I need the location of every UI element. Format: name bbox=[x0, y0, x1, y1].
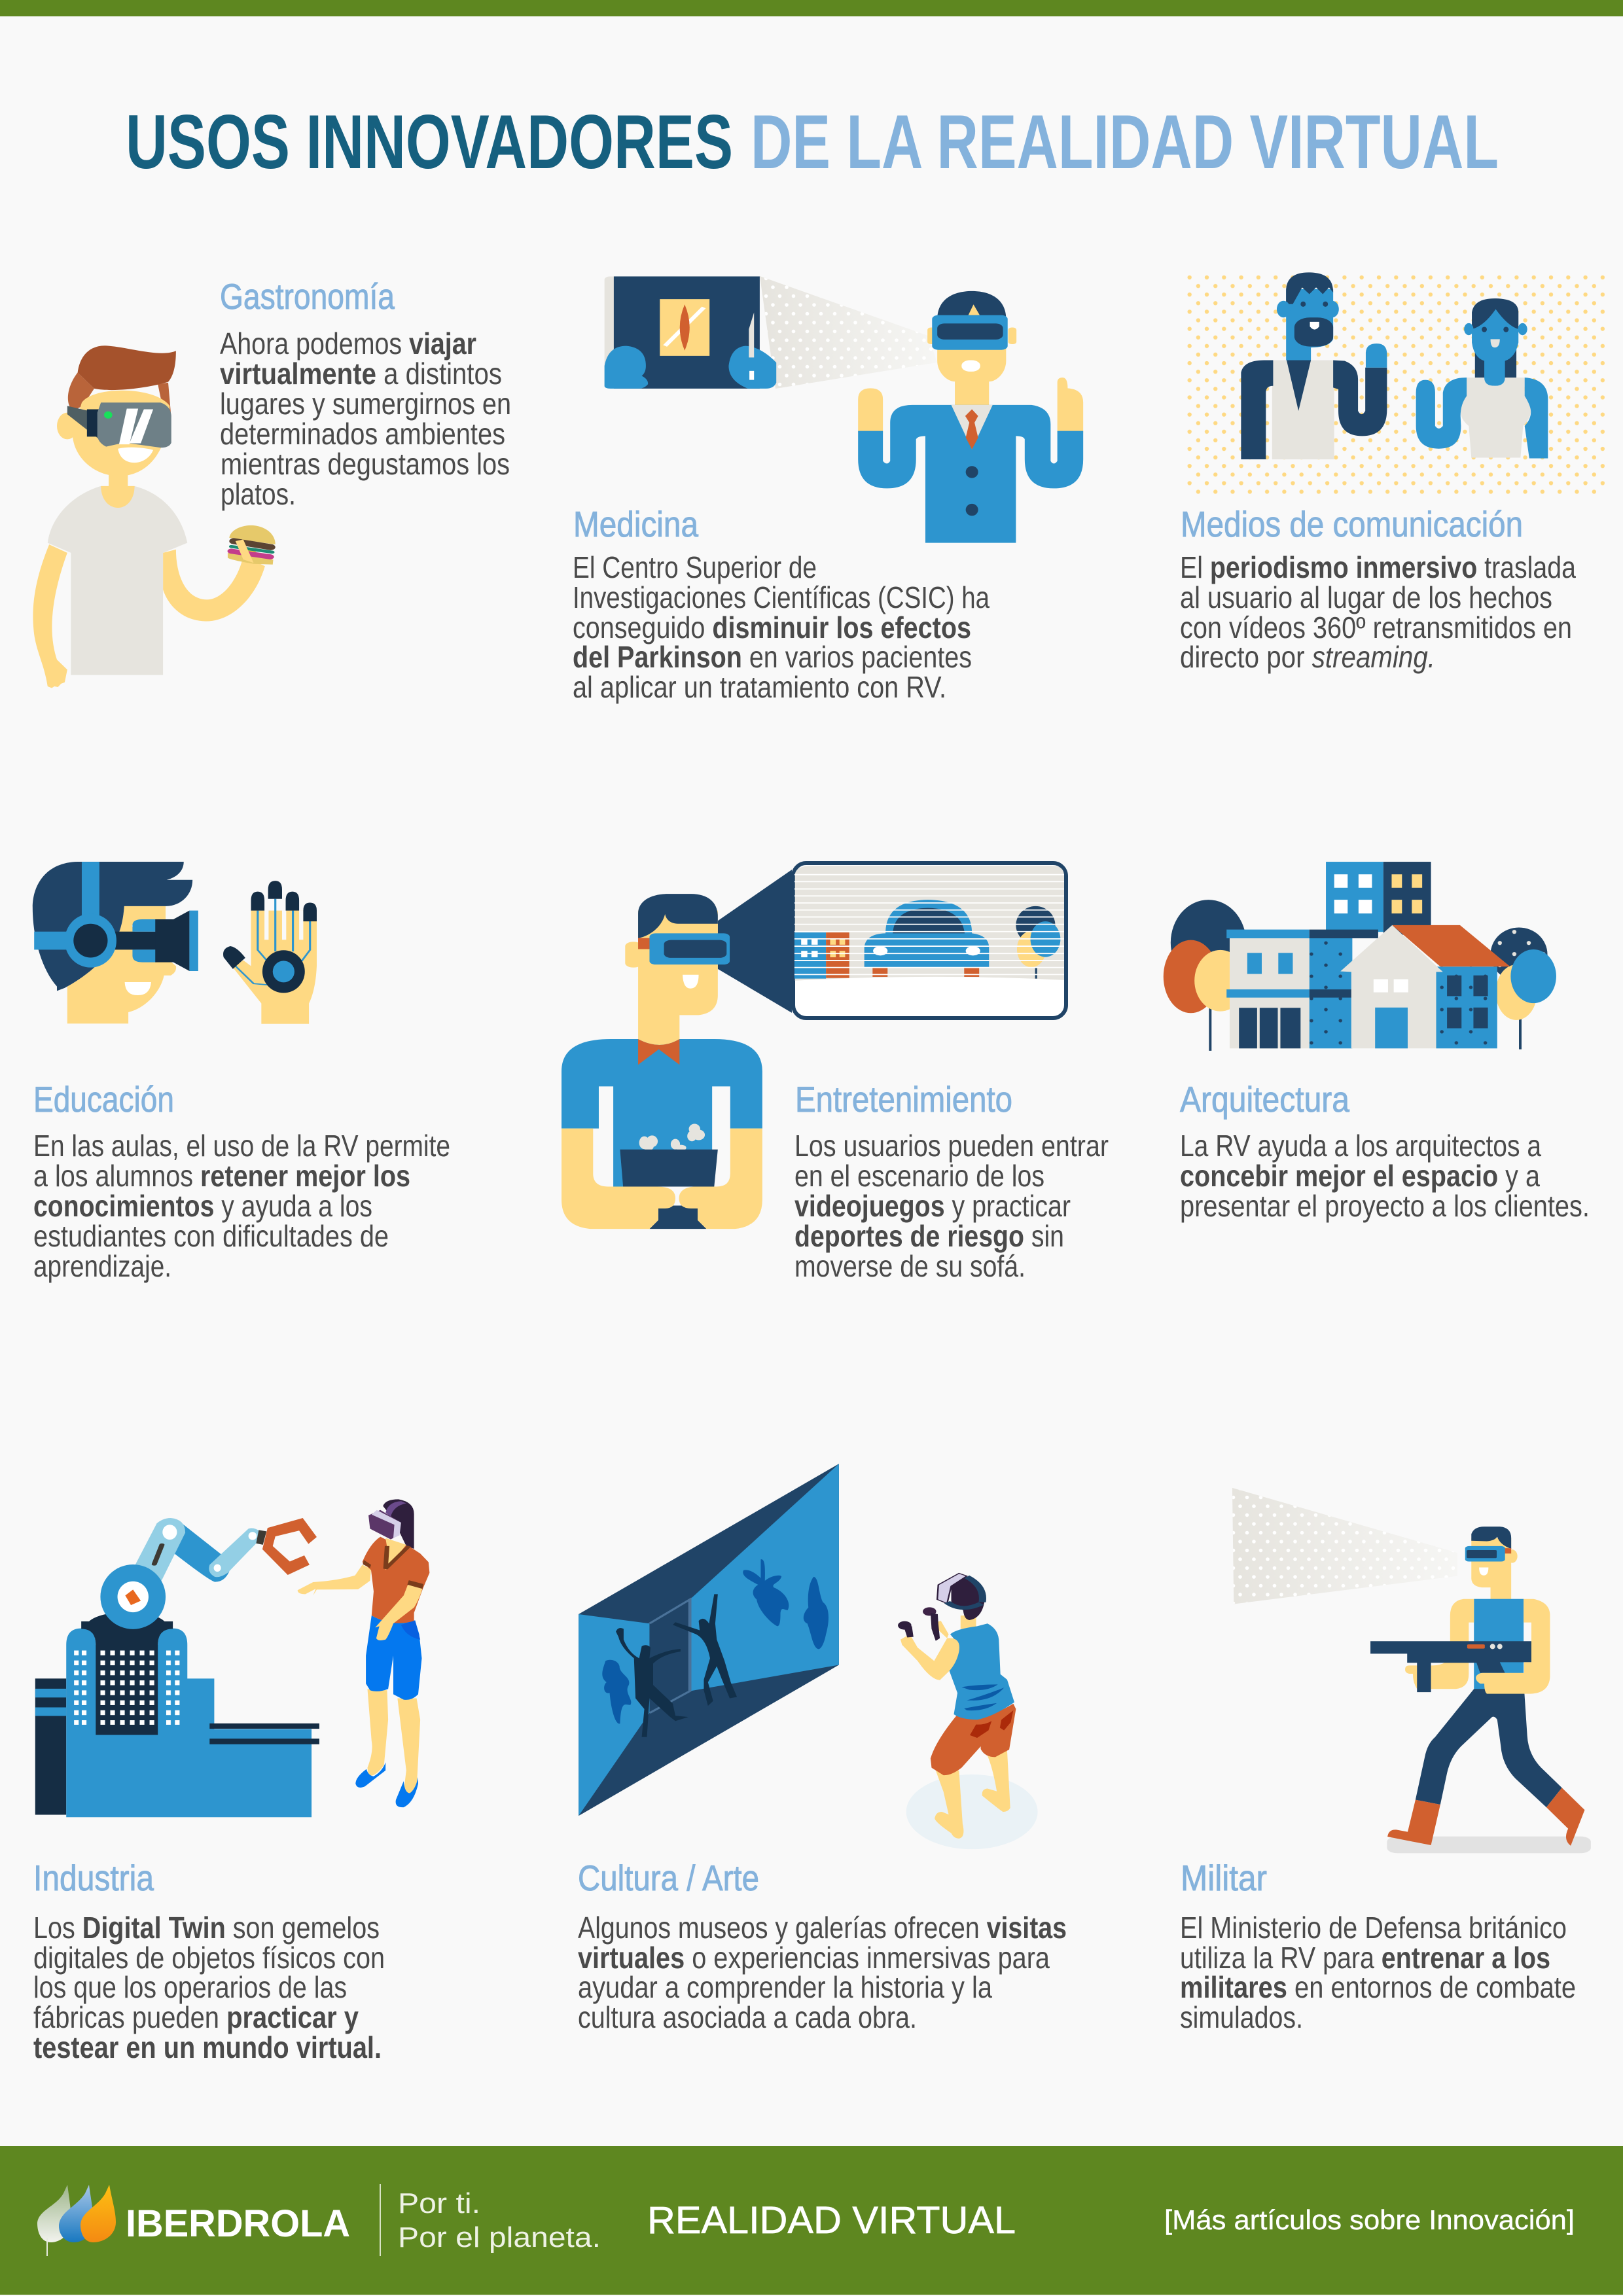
body text: al aplicar un tratamiento con RV. bbox=[573, 670, 946, 704]
illustration: haptic glove bbox=[223, 881, 317, 1024]
body text: militares en entornos de combate bbox=[1180, 1970, 1576, 2004]
body text: los que los operarios de las bbox=[33, 1970, 347, 2004]
body text: Investigaciones Científicas (CSIC) ha bbox=[573, 580, 990, 614]
illustration: student with headset bbox=[33, 862, 198, 1023]
body text bbox=[578, 1911, 1067, 2034]
panel: Militar bbox=[1180, 1488, 1591, 2034]
title: USOS INNOVADORES bbox=[126, 99, 733, 185]
body text: con vídeos 360º retransmitidos en bbox=[1180, 610, 1572, 645]
heading: Medicina bbox=[573, 504, 698, 544]
body text: Los usuarios pueden entrar bbox=[794, 1129, 1109, 1163]
illustration: visitor with headset and controllers bbox=[898, 1574, 1038, 1849]
body text: digitales de objetos físicos con bbox=[33, 1941, 385, 1975]
body text: El periodismo inmersivo traslada bbox=[1180, 550, 1576, 584]
illustration: projection beam bbox=[1232, 1488, 1457, 1604]
body text: videojuegos y practicar bbox=[794, 1189, 1071, 1223]
illustration: man with VR headset eating a burger bbox=[33, 345, 276, 688]
body text bbox=[33, 1911, 385, 2064]
body text bbox=[794, 1129, 1109, 1283]
body text: en el escenario de los bbox=[794, 1159, 1044, 1193]
body text: simulados. bbox=[1180, 2000, 1303, 2034]
figure: man with beard bbox=[1241, 272, 1387, 459]
tagline: Por el planeta. bbox=[398, 2221, 601, 2253]
illustration: virtual museum room bbox=[579, 1464, 839, 1816]
logo: Iberdrola wordmark: IBERDROLA bbox=[126, 2202, 350, 2245]
illustration: woman with headset bbox=[298, 1499, 429, 1807]
illustration: soldier with rifle bbox=[1370, 1527, 1591, 1853]
body text: a los alumnos retener mejor los bbox=[33, 1159, 410, 1193]
illustration: buildings and trees bbox=[1164, 862, 1556, 1051]
panel: Medios de comunicación bbox=[1180, 272, 1605, 674]
body text: Los Digital Twin son gemelos bbox=[33, 1911, 380, 1945]
illustration: game screen bbox=[793, 863, 1066, 1018]
body text: concebir mejor el espacio y a bbox=[1180, 1159, 1540, 1193]
footer label: REALIDAD VIRTUAL bbox=[647, 2199, 1016, 2242]
body text: conseguido disminuir los efectos bbox=[573, 610, 971, 645]
icon: burger bbox=[228, 525, 276, 565]
heading: Educación bbox=[33, 1079, 174, 1120]
body text: cultura asociada a cada obra. bbox=[578, 2000, 917, 2034]
body text: fábricas pueden practicar y bbox=[33, 2000, 359, 2034]
body text bbox=[33, 1129, 450, 1283]
illustration: person with popcorn bbox=[562, 870, 792, 1229]
body text: deportes de riesgo sin bbox=[794, 1219, 1064, 1253]
heading: Entretenimiento bbox=[795, 1079, 1012, 1120]
logo: Iberdrola leaves bbox=[37, 2185, 116, 2256]
top bar bbox=[0, 0, 1623, 16]
tagline: Por ti. bbox=[398, 2187, 480, 2219]
panel: Educación bbox=[33, 862, 450, 1283]
body text bbox=[1180, 1129, 1590, 1223]
body text bbox=[1180, 1911, 1576, 2034]
body text: lugares y sumergirnos en bbox=[220, 387, 511, 421]
body text: aprendizaje. bbox=[33, 1249, 171, 1283]
icon: popcorn bbox=[639, 1123, 705, 1151]
body text: determinados ambientes bbox=[220, 417, 505, 451]
panel: Cultura / Arte bbox=[578, 1464, 1067, 2034]
heading: Cultura / Arte bbox=[578, 1858, 759, 1898]
tagline bbox=[398, 2187, 601, 2253]
illustration: robot arm machine bbox=[35, 1518, 319, 1817]
panel: Entretenimiento bbox=[562, 863, 1109, 1283]
panel: Gastronomía bbox=[33, 276, 511, 688]
title bbox=[126, 99, 1499, 185]
robot arm bbox=[100, 1518, 317, 1629]
illustration: surgery screen bbox=[605, 276, 776, 389]
panel: Arquitectura bbox=[1164, 862, 1590, 1223]
panel: Medicina bbox=[573, 276, 1083, 704]
body text: El Ministerio de Defensa británico bbox=[1180, 1911, 1567, 1945]
body text bbox=[1180, 550, 1576, 674]
body text: platos. bbox=[221, 477, 296, 511]
illustration: dotted backdrop bbox=[1186, 274, 1605, 495]
body text: ayudar a comprender la historia y la bbox=[578, 1970, 992, 2004]
body text: conocimientos y ayuda a los bbox=[33, 1189, 372, 1223]
body text: del Parkinson en varios pacientes bbox=[573, 640, 972, 674]
illustration: beam dots bbox=[1232, 1488, 1457, 1604]
body text: estudiantes con dificultades de bbox=[33, 1219, 389, 1253]
body text: testear en un mundo virtual. bbox=[33, 2030, 382, 2064]
illustration: doctor with headset bbox=[858, 291, 1083, 543]
body text: mientras degustamos los bbox=[221, 447, 510, 481]
panel: Industria bbox=[33, 1499, 429, 2064]
divider bbox=[380, 2184, 381, 2256]
body text: directo por streaming. bbox=[1180, 640, 1435, 674]
body text: Ahora podemos viajar bbox=[220, 327, 476, 361]
body text: El Centro Superior de bbox=[573, 550, 817, 584]
body text: Algunos museos y galerías ofrecen visitas bbox=[578, 1911, 1067, 1945]
footer band bbox=[0, 2146, 1623, 2295]
illustration: projection beam bbox=[760, 276, 937, 389]
illustration: reporters bbox=[1241, 272, 1548, 459]
body text bbox=[573, 550, 990, 704]
body text: moverse de su sofá. bbox=[794, 1249, 1026, 1283]
body text bbox=[220, 327, 511, 511]
body text: En las aulas, el uso de la RV permite bbox=[33, 1129, 450, 1163]
heading: Militar bbox=[1181, 1858, 1267, 1898]
body text: La RV ayuda a los arquitectos a bbox=[1180, 1129, 1541, 1163]
heading: Industria bbox=[33, 1858, 154, 1898]
heading: Gastronomía bbox=[220, 276, 395, 317]
body text: utiliza la RV para entrenar a los bbox=[1180, 1941, 1550, 1975]
heading: Arquitectura bbox=[1180, 1079, 1349, 1120]
figure: woman bbox=[1416, 298, 1548, 459]
heading: Medios de comunicación bbox=[1181, 504, 1523, 544]
body text: al usuario al lugar de los hechos bbox=[1180, 580, 1552, 614]
body text: virtualmente a distintos bbox=[220, 357, 502, 391]
footer link: [Más artículos sobre Innovación] bbox=[1164, 2204, 1575, 2235]
body text: virtuales o experiencias inmersivas para bbox=[578, 1941, 1050, 1975]
